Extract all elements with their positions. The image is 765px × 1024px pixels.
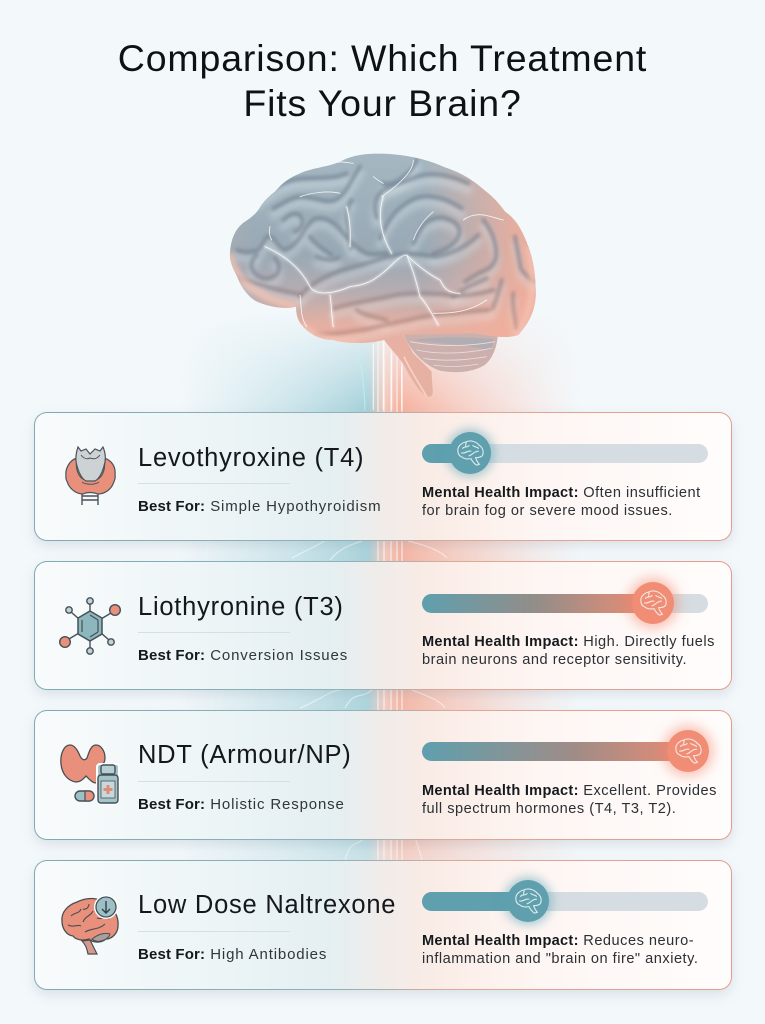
card: NDT — [34, 710, 732, 840]
cerebellum and brain stem — [382, 331, 498, 397]
name: Liothyronine (T3) — [138, 592, 344, 620]
card: Levothyroxine — [34, 412, 732, 540]
best for: Best For: Holistic Response — [138, 796, 345, 812]
card: Liothyronine — [34, 560, 732, 690]
mental health impact: full spectrum hormones (T4, T3, T2). — [422, 800, 676, 816]
icon: brain with down arrow — [61, 895, 119, 955]
mental health impact: Mental Health Impact: Excellent. Provides — [422, 782, 717, 798]
best for: Best For: Simple Hypothyroidism — [138, 498, 381, 514]
mental health impact: Mental Health Impact: Often insufficient — [422, 484, 701, 500]
mental health impact: Mental Health Impact: Reduces neuro- — [422, 932, 694, 948]
icon: thyroid — [65, 446, 116, 505]
slider: low impact — [422, 444, 708, 462]
slider: moderate impact — [422, 892, 708, 910]
background glow and nerve lines — [203, 327, 556, 860]
mental health impact: inflammation and "brain on fire" anxiety. — [422, 950, 698, 966]
slider: high impact — [422, 594, 708, 612]
best for: Best For: Conversion Issues — [138, 646, 348, 664]
icon: molecule — [59, 597, 121, 655]
name: NDT (Armour/NP) — [138, 740, 352, 768]
mental health impact — [422, 634, 715, 668]
mental health impact: for brain fog or severe mood issues. — [422, 502, 673, 518]
mental health impact — [422, 782, 717, 816]
spinal nerves — [353, 342, 402, 410]
title — [118, 37, 647, 124]
name: Levothyroxine (T4) — [138, 444, 364, 472]
best for: Best For: High Antibodies — [138, 946, 327, 962]
icon: thyroid and medicine bottle — [60, 744, 120, 805]
name: Low Dose Naltrexone — [138, 890, 396, 918]
title: Fits Your Brain? — [243, 82, 522, 124]
slider: excellent impact — [422, 742, 708, 760]
title: Comparison: Which Treatment — [118, 37, 647, 79]
illustration: brain — [230, 154, 536, 410]
card: Low Dose Naltrexone — [34, 860, 732, 990]
mental health impact — [422, 932, 698, 966]
mental health impact: Mental Health Impact: High. Directly fuels — [422, 634, 715, 650]
neural sparks — [265, 160, 503, 327]
cerebrum with gyri — [230, 154, 536, 343]
mental health impact: brain neurons and receptor sensitivity. — [422, 652, 687, 668]
mental health impact — [422, 484, 701, 518]
